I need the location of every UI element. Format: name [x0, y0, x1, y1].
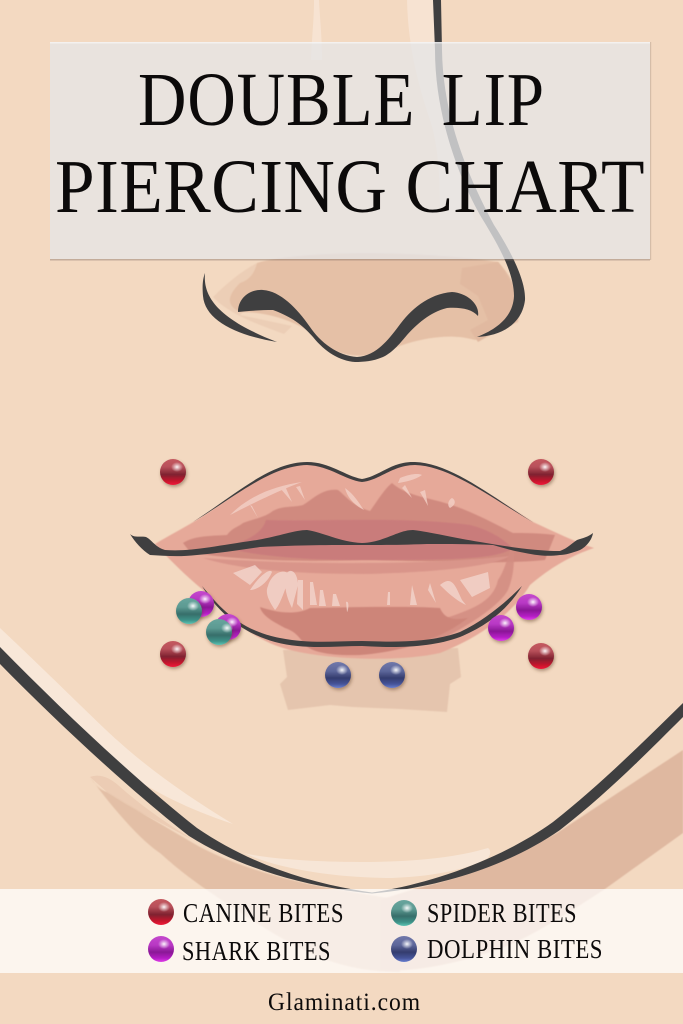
title: PIERCING CHART [55, 145, 645, 229]
upper lip shadow [183, 483, 555, 562]
pearl: dolphin right [379, 662, 405, 688]
pearl: spider upper [176, 598, 202, 624]
lower lip bottom shade [260, 607, 468, 655]
title [55, 58, 645, 229]
pearl: dolphin left [325, 662, 351, 688]
lower lip highlights [233, 565, 490, 612]
pearl: shark left upper [188, 591, 214, 617]
pearl: canine bottom right [528, 643, 554, 669]
pearl: canine top right [528, 459, 554, 485]
nose wing shade [213, 263, 292, 334]
nose outer line right [433, 0, 525, 337]
legend: spider bites: SPIDER BITES [427, 898, 577, 928]
pearl: canine top left [160, 459, 186, 485]
pearl: shark right lower [488, 615, 514, 641]
legend: shark bites: SHARK BITES [182, 936, 331, 966]
illustration: nose [203, 0, 525, 362]
jaw line [0, 647, 683, 894]
title panel [50, 42, 651, 260]
mouth line [130, 530, 593, 556]
legend: spider bites [391, 898, 577, 928]
upper lip highlights [230, 474, 455, 518]
chin shadow left [90, 777, 400, 972]
nose bridge highlights [311, 0, 475, 220]
illustration: lips [130, 462, 594, 659]
pearl: shark left lower [215, 614, 241, 640]
upper lip outline [193, 462, 534, 523]
lower lip outline [202, 586, 522, 647]
legend: canine bites: CANINE BITES [183, 898, 344, 928]
nose outer line left [203, 273, 277, 342]
chin highlight [244, 848, 490, 878]
nose side shade [460, 262, 518, 342]
legend: dolphin bites: DOLPHIN BITES [427, 934, 603, 964]
nose shading [230, 253, 519, 356]
mouth centre shadow [228, 520, 512, 560]
lower lip right shade [410, 543, 514, 640]
jaw highlight left [0, 628, 233, 824]
footer: site name: Glaminati.com [268, 989, 421, 1016]
illustration: jaw and chin [0, 628, 683, 972]
legend: shark bites [148, 936, 331, 966]
lip base [155, 464, 594, 659]
nostrils and tip [238, 290, 478, 362]
pearl: shark right upper [516, 594, 542, 620]
pearl: canine bottom left [160, 641, 186, 667]
illustration: chin shade under lips [280, 648, 461, 712]
chin shadow strip [90, 776, 193, 840]
neck shadow right [380, 750, 683, 970]
title: DOUBLE LIP [138, 58, 545, 142]
legend band [0, 889, 683, 973]
lower lip upper shade [203, 556, 510, 574]
pearl: spider lower [206, 619, 233, 645]
